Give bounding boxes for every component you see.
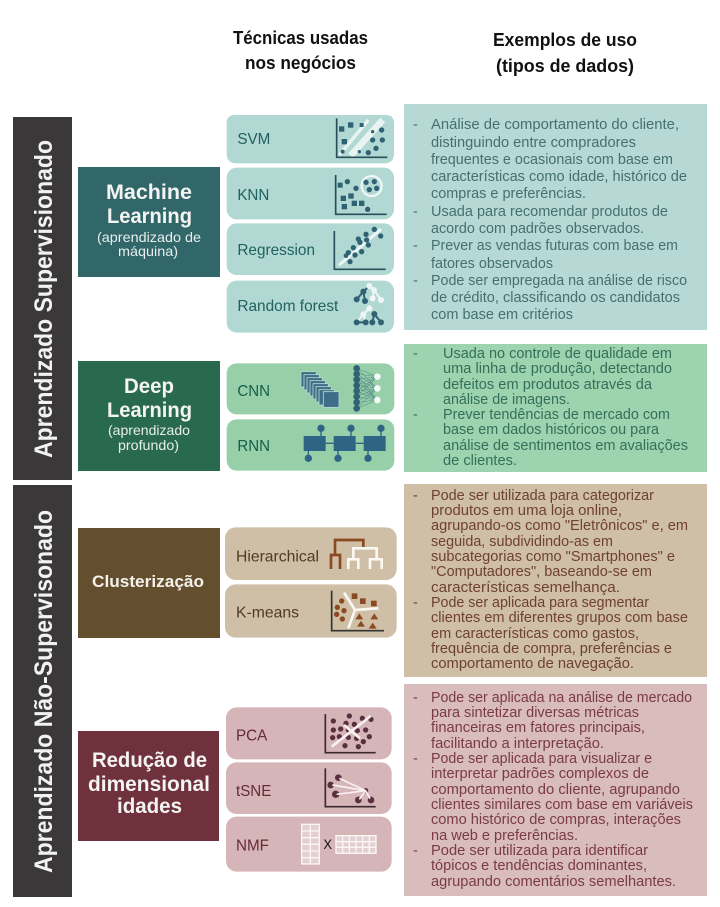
panel: exemplos clusterização: Pode ser utilizada para categorizar xyxy=(431,488,654,504)
panel: exemplos machine learning: Pode ser empregada na análise de risco xyxy=(431,273,687,289)
panel: aprendizado supervisionado xyxy=(13,117,72,480)
technique group: clusterização cards xyxy=(225,527,397,638)
panel: exemplos redução de dimensionalidade: - xyxy=(413,751,418,767)
card: SVM: SVM xyxy=(237,131,270,148)
panel: exemplos redução de dimensionalidade: tópicos e tendências dominantes, xyxy=(431,858,647,874)
panel: exemplos clusterização: "Computadores", baseando-se em xyxy=(431,564,652,580)
panel: exemplos deep learning: - xyxy=(413,407,418,423)
heading: técnicas usadas nos negócios xyxy=(233,28,368,73)
panel: aprendizado supervisionado: Aprendizado Supervisionado xyxy=(30,140,58,458)
panel: exemplos clusterização: produtos em uma loja online, xyxy=(431,503,622,519)
panel: exemplos clusterização: comportamento de navegação. xyxy=(431,656,634,672)
panel: exemplos redução de dimensionalidade: interpretar padrões complexos de xyxy=(431,766,649,782)
panel: exemplos redução de dimensionalidade: Pode ser aplicada para visualizar e xyxy=(431,751,652,767)
panel: exemplos redução de dimensionalidade: Pode ser utilizada para identificar xyxy=(431,843,648,859)
panel: exemplos machine learning: acordo com padrões observados. xyxy=(431,221,644,237)
category: machine learning: Learning xyxy=(107,205,192,228)
card: tSNE xyxy=(226,762,392,814)
panel: exemplos deep learning: de clientes. xyxy=(443,453,517,469)
panel: exemplos redução de dimensionalidade: financeiras em fatores principais, xyxy=(431,720,645,736)
card: RNN: RNN xyxy=(237,438,270,455)
panel: exemplos machine learning: - xyxy=(413,204,418,220)
panel: exemplos machine learning: distinguindo entre compradores xyxy=(431,135,636,151)
category: clusterização: Clusterização xyxy=(92,572,204,591)
card: SVM xyxy=(227,115,394,163)
panel: exemplos machine learning: Prever as vendas futuras com base em xyxy=(431,238,678,254)
panel: exemplos clusterização: em características como gastos, xyxy=(431,626,639,642)
panel: exemplos machine learning: frequentes e ocasionais com base em xyxy=(431,152,673,168)
card: NMF: NMF xyxy=(236,838,269,855)
card: Random forest xyxy=(227,281,394,333)
category: machine learning: máquina) xyxy=(118,243,178,259)
card: RNN xyxy=(227,419,394,471)
panel: exemplos machine learning: fatores observados xyxy=(431,256,553,272)
panel: exemplos machine learning: características como idade, histórico de xyxy=(431,169,687,185)
panel: exemplos machine learning: compras e preferências. xyxy=(431,186,586,202)
panel: exemplos deep learning: defeitos em produtos através da xyxy=(443,377,653,393)
panel: exemplos redução de dimensionalidade: clientes similares com base em variáveis xyxy=(431,797,693,813)
panel: exemplos machine learning: Usada para recomendar produtos de xyxy=(431,204,668,220)
panel: exemplos clusterização: características semelhança. xyxy=(431,580,620,596)
panel: exemplos clusterização: - xyxy=(413,488,418,504)
panel: exemplos redução de dimensionalidade: agrupando comentários semelhantes. xyxy=(431,874,676,890)
card: NMF: X xyxy=(323,836,333,852)
panel: exemplos deep learning: - xyxy=(413,346,418,362)
category: machine learning xyxy=(78,167,220,277)
card: CNN: CNN xyxy=(237,383,270,400)
category: deep learning: Learning xyxy=(107,399,192,422)
panel: exemplos redução de dimensionalidade: comportamento do cliente, agrupando xyxy=(431,782,680,798)
card: KNN: KNN xyxy=(237,187,269,204)
panel: exemplos redução de dimensionalidade: para sintetizar diversas métricas xyxy=(431,705,639,721)
card: K-means xyxy=(225,584,397,638)
card: tSNE: tSNE xyxy=(236,783,271,800)
card: NMF xyxy=(226,817,392,872)
panel: exemplos redução de dimensionalidade: facilitando a interpretação. xyxy=(431,736,604,752)
category: deep learning: profundo) xyxy=(118,437,179,453)
category: machine learning: (aprendizado de xyxy=(97,229,201,245)
panel: exemplos clusterização: seguida, subdividindo-as em xyxy=(431,534,613,550)
panel: exemplos redução de dimensionalidade: - xyxy=(413,690,418,706)
panel: exemplos machine learning: - xyxy=(413,117,418,133)
panel: exemplos clusterização: - xyxy=(413,595,418,611)
card: Hierarchical xyxy=(225,527,397,580)
technique group: machine learning cards xyxy=(227,115,394,333)
panel: exemplos machine learning xyxy=(404,104,707,330)
card: CNN xyxy=(227,363,394,414)
panel: exemplos redução de dimensionalidade xyxy=(404,684,707,896)
panel: exemplos machine learning: com base em critérios xyxy=(431,307,573,323)
panel: exemplos redução de dimensionalidade: na web e preferências. xyxy=(431,828,578,844)
heading: exemplos de uso: (tipos de dados) xyxy=(496,56,634,76)
heading: exemplos de uso: Exemplos de uso xyxy=(493,30,637,50)
category: deep learning xyxy=(78,361,220,471)
panel: exemplos clusterização: frequência de compra, preferências e xyxy=(431,641,672,657)
category: redução de dimensionalidades xyxy=(78,731,219,841)
category: deep learning: (aprendizado xyxy=(108,422,190,438)
panel: aprendizado não-supervisionado xyxy=(13,485,72,897)
panel: exemplos deep learning: análise de sentimentos em avaliações xyxy=(443,438,688,454)
card: Regression xyxy=(227,223,394,275)
panel: exemplos clusterização: agrupando-os como "Eletrônicos" e, em xyxy=(431,518,688,534)
technique group: redução de dimensionalidade cards xyxy=(226,707,392,872)
card: Regression: Regression xyxy=(237,242,315,259)
panel: aprendizado não-supervisionado: Aprendizado Não-Supervisonado xyxy=(30,510,58,873)
card: K-means: K-means xyxy=(236,605,299,622)
panel: exemplos clusterização: clientes em diferentes grupos com base xyxy=(431,610,688,626)
category: clusterização xyxy=(78,528,220,638)
category: deep learning: Deep xyxy=(124,375,174,398)
panel: exemplos deep learning: análise de imagens. xyxy=(443,392,570,408)
panel: exemplos clusterização xyxy=(404,484,707,677)
heading: técnicas usadas nos negócios: nos negócios xyxy=(245,53,356,73)
panel: exemplos deep learning: base em dados históricos ou para xyxy=(443,422,660,438)
heading: técnicas usadas nos negócios: Técnicas usadas xyxy=(233,28,368,48)
panel: exemplos redução de dimensionalidade: Pode ser aplicada na análise de mercado xyxy=(431,690,692,706)
card: Random forest: Random forest xyxy=(237,298,339,315)
panel: exemplos machine learning: de crédito, classificando os candidatos xyxy=(431,290,680,306)
category: machine learning: Machine xyxy=(106,181,192,204)
category: redução de dimensionalidades: idades xyxy=(117,795,182,818)
panel: exemplos deep learning xyxy=(404,344,707,472)
card: KNN xyxy=(227,168,394,219)
category: redução de dimensionalidades: dimensional xyxy=(88,773,210,796)
category: redução de dimensionalidades: Redução de xyxy=(92,749,207,772)
panel: exemplos deep learning: Usada no controle de qualidade em xyxy=(443,346,672,362)
panel: exemplos redução de dimensionalidade: - xyxy=(413,843,418,859)
panel: exemplos redução de dimensionalidade: como histórico de compras, interações xyxy=(431,812,681,828)
heading: exemplos de uso xyxy=(493,30,637,76)
panel: exemplos machine learning: - xyxy=(413,238,418,254)
card: PCA xyxy=(226,707,392,759)
panel: exemplos deep learning: uma linha de produção, detectando xyxy=(443,361,672,377)
technique group: deep learning cards xyxy=(227,363,394,471)
card: PCA: PCA xyxy=(236,728,268,745)
card: Hierarchical: Hierarchical xyxy=(236,549,319,566)
panel: exemplos machine learning: Análise de comportamento do cliente, xyxy=(431,117,679,133)
panel: exemplos clusterização: subcategorias como "Smartphones" e xyxy=(431,549,675,565)
panel: exemplos deep learning: Prever tendências de mercado com xyxy=(443,407,670,423)
panel: exemplos clusterização: Pode ser aplicada para segmentar xyxy=(431,595,649,611)
panel: exemplos machine learning: - xyxy=(413,273,418,289)
